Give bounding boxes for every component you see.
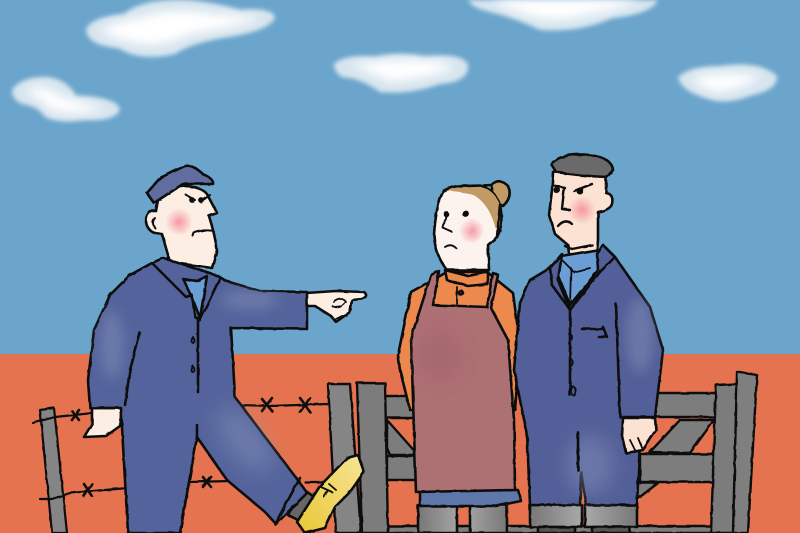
coverall — [88, 258, 307, 533]
diagonal braces — [387, 420, 714, 500]
boot sock — [288, 491, 318, 522]
left hand — [84, 408, 123, 437]
figure: man in beret — [514, 154, 663, 533]
seams and collar — [550, 245, 620, 470]
apron skirt — [420, 490, 521, 506]
cloud: left — [12, 77, 120, 121]
cloud: top centre — [468, 0, 658, 30]
face details — [443, 212, 456, 248]
pointing fingers — [332, 299, 350, 319]
buttons — [192, 337, 194, 372]
upper wire — [33, 404, 327, 423]
wooden gate — [328, 372, 757, 533]
hair bun — [492, 182, 510, 206]
sleeves — [398, 272, 520, 410]
pointing hand — [306, 291, 366, 322]
figure: pointing man — [84, 166, 366, 533]
lower wire — [40, 481, 330, 499]
cloud: right — [678, 64, 777, 102]
post: far right — [733, 372, 757, 533]
shirt — [558, 250, 600, 305]
figure: woman — [398, 182, 521, 533]
head — [434, 186, 501, 270]
post: gate right — [711, 384, 738, 533]
apron darker tint — [420, 331, 460, 379]
beret — [551, 154, 613, 177]
clouds — [12, 0, 777, 121]
flat cap — [147, 166, 213, 203]
face details — [552, 184, 592, 249]
post: gate left — [357, 383, 388, 533]
cheek — [165, 208, 193, 236]
collar — [445, 270, 488, 286]
apron — [411, 271, 515, 492]
cloud: middle — [334, 54, 468, 93]
hand — [622, 418, 656, 453]
fence post — [40, 408, 67, 533]
clog — [297, 455, 364, 533]
post: outer left — [328, 384, 361, 533]
head — [549, 172, 612, 262]
ground — [0, 354, 800, 533]
sky — [0, 0, 800, 356]
cheek — [568, 196, 596, 224]
boots — [418, 505, 507, 533]
coverall — [514, 245, 663, 505]
barbed wire fence — [33, 398, 330, 533]
boots — [530, 505, 637, 527]
coat highlights — [566, 297, 654, 495]
face details — [153, 195, 214, 236]
highlights — [101, 291, 283, 481]
clog marks — [321, 484, 336, 497]
neck and head — [146, 186, 217, 268]
collar and seams — [90, 263, 300, 524]
rails — [385, 393, 716, 533]
dress placket — [456, 287, 458, 304]
barbs — [72, 398, 310, 496]
cheek — [459, 218, 485, 244]
hair — [443, 186, 500, 230]
cloud: top left — [86, 0, 275, 57]
shirt — [183, 276, 207, 318]
